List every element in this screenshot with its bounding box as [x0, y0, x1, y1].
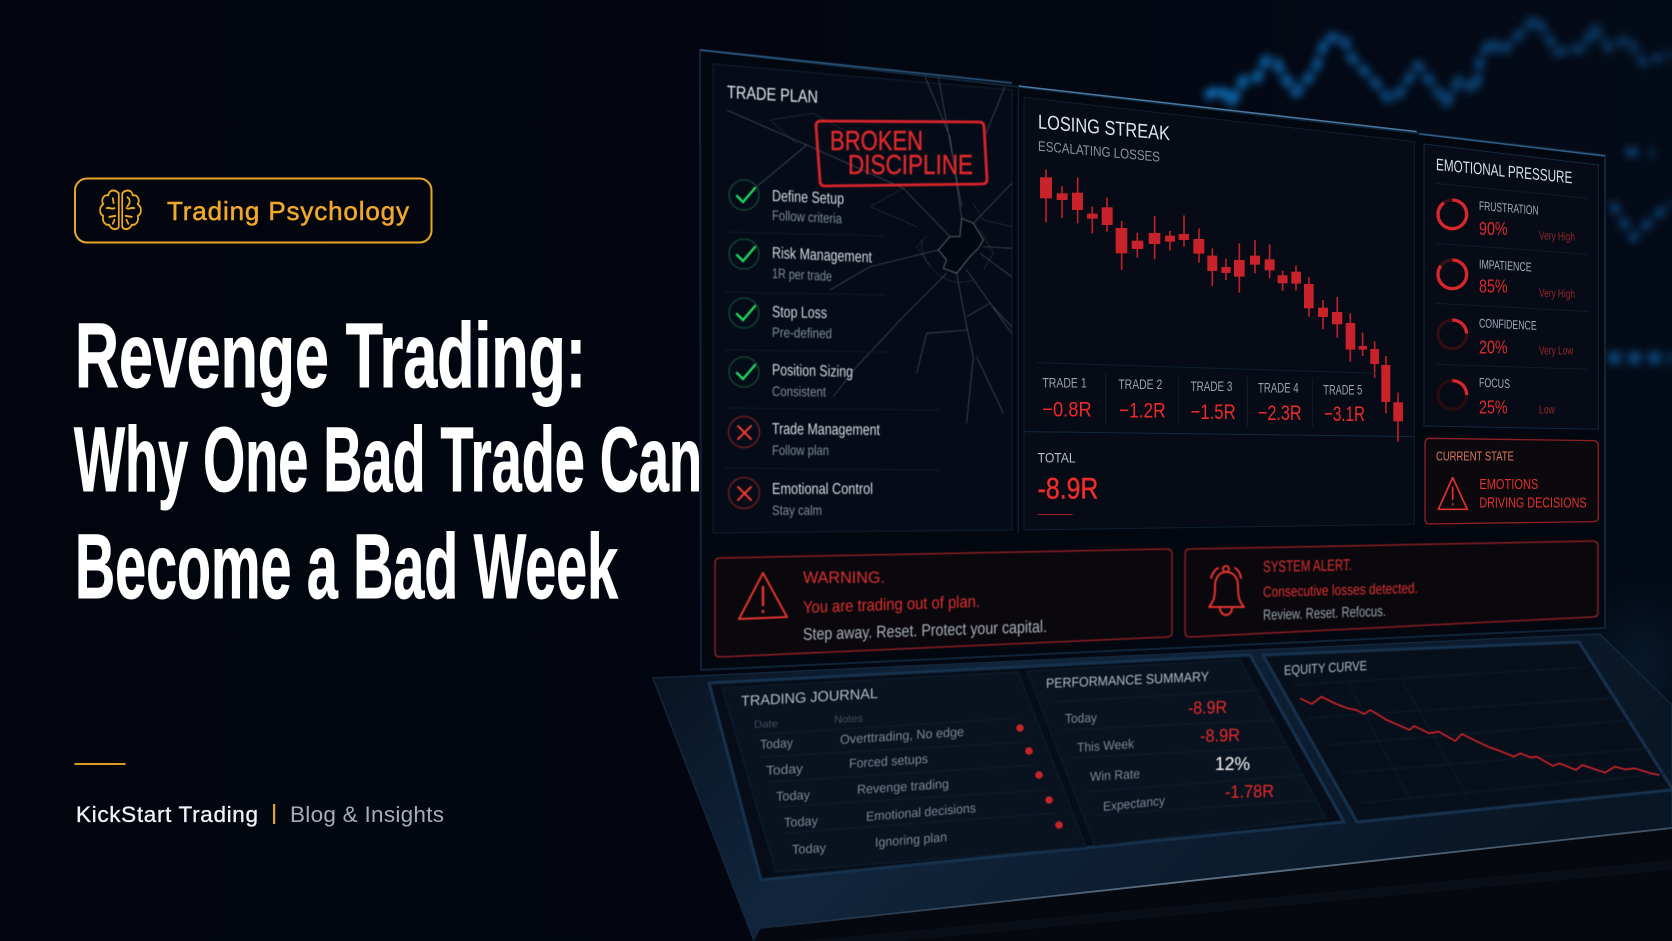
cross icons — [728, 416, 760, 508]
heading: equity curve: EQUITY CURVE — [1284, 658, 1367, 678]
heading: trade plan: TRADE PLAN — [727, 82, 818, 107]
alert text: Review. Reset. Refocus. — [1263, 603, 1386, 624]
title: Revenge Trading: — [75, 305, 586, 407]
summary values: 12% — [1215, 754, 1250, 774]
gauge levels: Very High — [1539, 228, 1575, 244]
gauge levels — [1539, 228, 1575, 416]
trade labels: TRADE 3 — [1191, 378, 1232, 394]
trade values: −0.8R — [1042, 398, 1092, 422]
checklist labels: Define Setup — [772, 188, 844, 208]
gauge names: CONFIDENCE — [1479, 316, 1537, 333]
gauge percentages: 90% — [1479, 218, 1508, 239]
footer: brand line — [76, 802, 444, 827]
gauge levels: Very High — [1539, 286, 1575, 301]
checklist labels — [772, 188, 880, 498]
gauge levels: Very Low — [1539, 343, 1574, 357]
gauge percentages — [1479, 218, 1508, 417]
journal table — [754, 713, 976, 857]
accent rule — [74, 763, 126, 765]
trade labels: TRADE 4 — [1258, 380, 1299, 396]
checklist labels: Risk Management — [772, 245, 872, 267]
stamp: broken discipline: BROKEN — [830, 125, 923, 156]
warning text — [803, 568, 1047, 644]
journal table: Emotional decisions — [866, 800, 976, 824]
stamp: broken discipline — [816, 121, 987, 186]
gauge names: IMPATIENCE — [1479, 257, 1532, 274]
checklist sublabels: Follow criteria — [772, 207, 842, 227]
journal table: Ignoring plan — [875, 829, 947, 850]
gauge names: FRUSTRATION — [1479, 199, 1539, 218]
gauge names: FOCUS — [1479, 376, 1510, 391]
journal table: Date — [754, 718, 778, 731]
gauge rings — [1438, 200, 1467, 409]
checklist labels: Position Sizing — [772, 362, 853, 381]
trade values: −1.5R — [1191, 400, 1236, 424]
subheading: ESCALATING LOSSES — [1038, 138, 1160, 165]
summary labels: Win Rate — [1090, 766, 1140, 784]
total: TOTAL — [1038, 449, 1076, 465]
checklist sublabels: Follow plan — [772, 442, 829, 458]
checklist sublabels: Pre-defined — [772, 324, 832, 341]
icon: brain — [100, 191, 141, 229]
checklist labels: Stop Loss — [772, 304, 827, 322]
footer: brand line: KickStart Trading — [76, 802, 258, 827]
alert text: Consecutive losses detected. — [1263, 580, 1418, 601]
title: Why One Bad Trade Can — [74, 409, 702, 511]
trade values — [1042, 398, 1365, 426]
gauge percentages: 20% — [1479, 336, 1508, 357]
heading: losing streak: LOSING STREAK — [1038, 111, 1171, 145]
summary labels — [1065, 710, 1165, 814]
warning text: You are trading out of plan. — [803, 592, 980, 617]
title: Become a Bad Week — [75, 516, 618, 618]
console tray — [653, 634, 1672, 941]
heading: performance summary: PERFORMANCE SUMMARY — [1046, 669, 1209, 691]
panel: losing streak — [1018, 86, 1417, 533]
journal table: Revenge trading — [857, 776, 949, 797]
line chart: equity curve — [1300, 697, 1659, 775]
total: -8.9R — [1038, 472, 1098, 505]
trade labels: TRADE 1 — [1042, 374, 1087, 390]
check icons — [729, 180, 759, 387]
summary values: -8.9R — [1188, 697, 1227, 718]
blurred background market chart — [1206, 18, 1672, 358]
gauge percentages: 25% — [1479, 396, 1508, 417]
heading: trading journal: TRADING JOURNAL — [741, 686, 878, 710]
gauge levels: Low — [1539, 402, 1555, 416]
callout: current state: CURRENT STATE — [1436, 450, 1514, 464]
warning text: WARNING. — [803, 568, 885, 587]
trade labels: TRADE 2 — [1118, 376, 1162, 392]
alert text — [1263, 557, 1418, 624]
callout: current state: DRIVING DECISIONS — [1479, 496, 1587, 512]
summary labels: This Week — [1077, 736, 1134, 755]
callout: current state — [1425, 438, 1598, 524]
journal table: Today — [766, 761, 804, 778]
icon: warning triangle — [1438, 478, 1467, 509]
journal table: Today — [760, 735, 793, 752]
status dots — [1016, 724, 1063, 829]
callout: current state: EMOTIONS — [1479, 477, 1538, 493]
panel: performance summary — [1046, 669, 1274, 814]
trade values: −3.1R — [1324, 402, 1365, 426]
panel: trading journal — [741, 686, 1063, 857]
icon: warning triangle — [739, 573, 787, 619]
monitor frame — [700, 50, 1605, 670]
gauge names — [1479, 199, 1539, 391]
summary values: -1.78R — [1225, 781, 1274, 802]
candlestick chart — [1040, 169, 1403, 442]
badge: Trading Psychology — [75, 178, 432, 242]
checklist sublabels: 1R per trade — [772, 265, 832, 284]
journal table: Forced setups — [849, 751, 928, 771]
trade labels: TRADE 5 — [1323, 381, 1362, 397]
summary labels: Expectancy — [1103, 793, 1165, 814]
summary labels: Today — [1065, 710, 1097, 726]
journal table: Overttrading, No edge — [840, 724, 964, 747]
panel: emotional pressure — [1419, 134, 1605, 627]
background glow right — [1610, 620, 1672, 710]
journal table: Today — [784, 813, 818, 830]
summary values — [1188, 697, 1274, 802]
badge label: Trading Psychology — [167, 196, 409, 226]
trade labels — [1042, 374, 1362, 397]
gauge percentages: 85% — [1479, 276, 1508, 297]
checklist sublabels — [772, 207, 842, 518]
heading: emotional pressure: EMOTIONAL PRESSURE — [1436, 155, 1572, 187]
trade values: −2.3R — [1258, 401, 1302, 425]
summary values: -8.9R — [1200, 725, 1240, 746]
trade values: −1.2R — [1119, 399, 1166, 423]
panel: trade plan — [700, 50, 1012, 533]
alert text: SYSTEM ALERT. — [1263, 557, 1352, 576]
journal table: Notes — [834, 713, 863, 726]
footer: brand line: Blog & Insights — [290, 802, 444, 827]
panel: system alert — [1185, 541, 1598, 637]
journal and performance panel — [709, 655, 1344, 880]
title — [74, 305, 702, 618]
journal table: Today — [776, 787, 810, 804]
warning text: Step away. Reset. Protect your capital. — [803, 617, 1047, 644]
journal table: Today — [792, 840, 826, 857]
checklist sublabels: Stay calm — [772, 502, 822, 518]
checklist sublabels: Consistent — [772, 383, 826, 400]
checklist labels: Emotional Control — [772, 481, 873, 498]
icon: bell — [1209, 566, 1244, 615]
checklist labels: Trade Management — [772, 421, 880, 439]
stamp: broken discipline: DISCIPLINE — [848, 149, 973, 180]
total — [1038, 449, 1098, 515]
panel: warning alert — [715, 549, 1172, 657]
cracked glass — [727, 77, 1012, 423]
panel: equity curve — [1263, 642, 1672, 822]
